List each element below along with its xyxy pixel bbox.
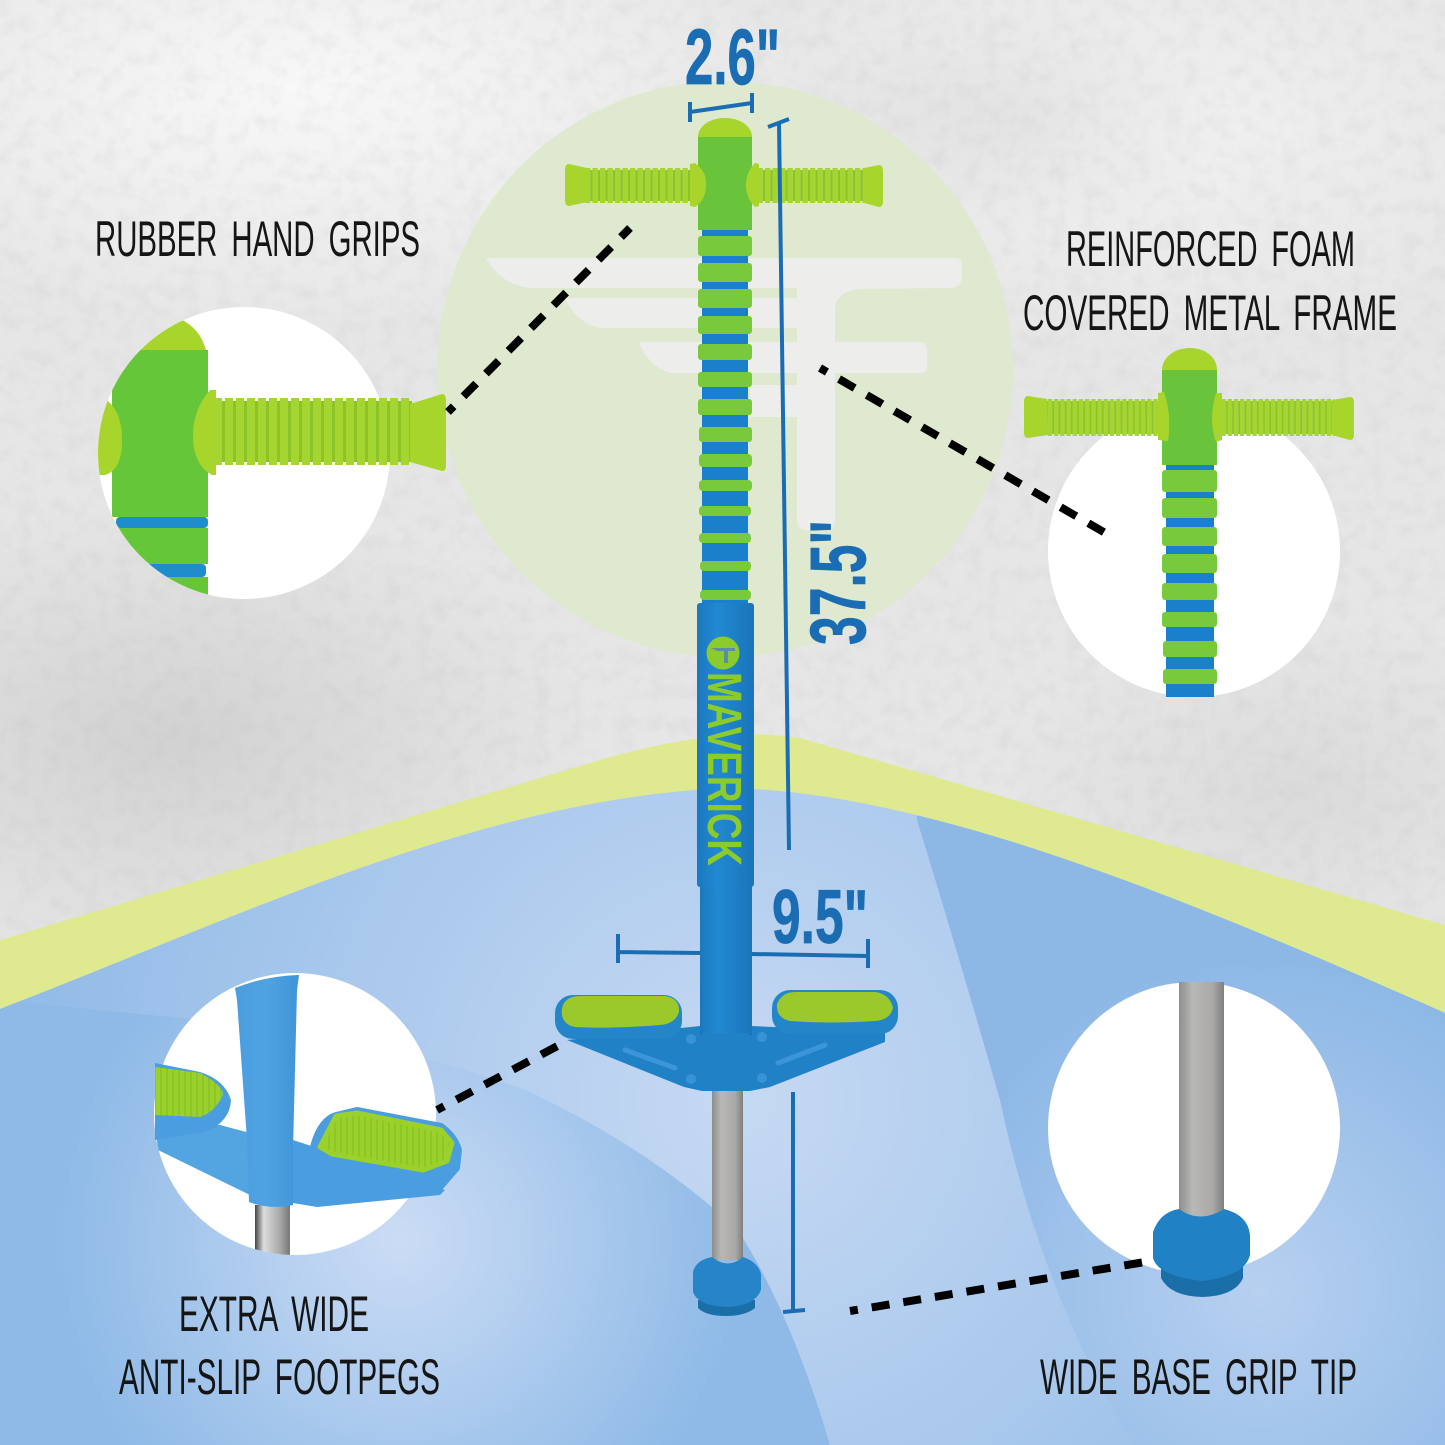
rubber tip (693, 1257, 761, 1316)
label: anti-slip footpegs: ANTI-SLIP FOOTPEGS (119, 1349, 440, 1405)
metal rod (712, 1090, 743, 1260)
yellow-green arc band (0, 734, 1445, 1445)
dimension: upper height line (768, 119, 789, 850)
panel: blue floor (0, 789, 1445, 1445)
dome cap (698, 118, 752, 137)
dotted leader: grip tip (850, 1262, 1145, 1311)
dimension label 37.5 inches: 37.5" (793, 520, 882, 645)
blue tube (700, 885, 752, 1035)
panel: pale green logo circle (437, 81, 1013, 657)
detail circle: foam covered frame (1024, 348, 1354, 697)
right hand grip (746, 163, 883, 207)
tube logo badge (706, 636, 740, 670)
brand name: MAVERICK (697, 672, 750, 866)
dimension label 9.5 inches: 9.5" (772, 875, 868, 960)
left footpeg (555, 995, 682, 1039)
right footpeg (772, 990, 898, 1034)
dimension: lower height line (783, 1092, 805, 1312)
dimension: footpeg width (618, 934, 868, 968)
dotted leader: footpegs (437, 1042, 565, 1110)
dotted leader: hand grips (448, 228, 630, 412)
footpeg bracket with rivets (567, 1026, 885, 1091)
green foam rings (698, 236, 752, 600)
dimension: handle centre width (690, 93, 752, 122)
dotted leader: foam frame (820, 368, 1107, 534)
label: extra wide: EXTRA WIDE (179, 1286, 369, 1342)
detail circle: rubber hand grips (98, 307, 446, 601)
detail circle: wide base grip tip (1048, 982, 1340, 1297)
dimension label 2.6 inches: 2.6" (685, 12, 780, 101)
foam upper block (698, 137, 752, 230)
detail circle: anti-slip footpegs (154, 973, 459, 1265)
foam upper blue core (702, 230, 748, 603)
pogo stick product (555, 118, 898, 1316)
label: rubber hand grips: RUBBER HAND GRIPS (95, 211, 420, 267)
left hand grip (565, 163, 706, 207)
